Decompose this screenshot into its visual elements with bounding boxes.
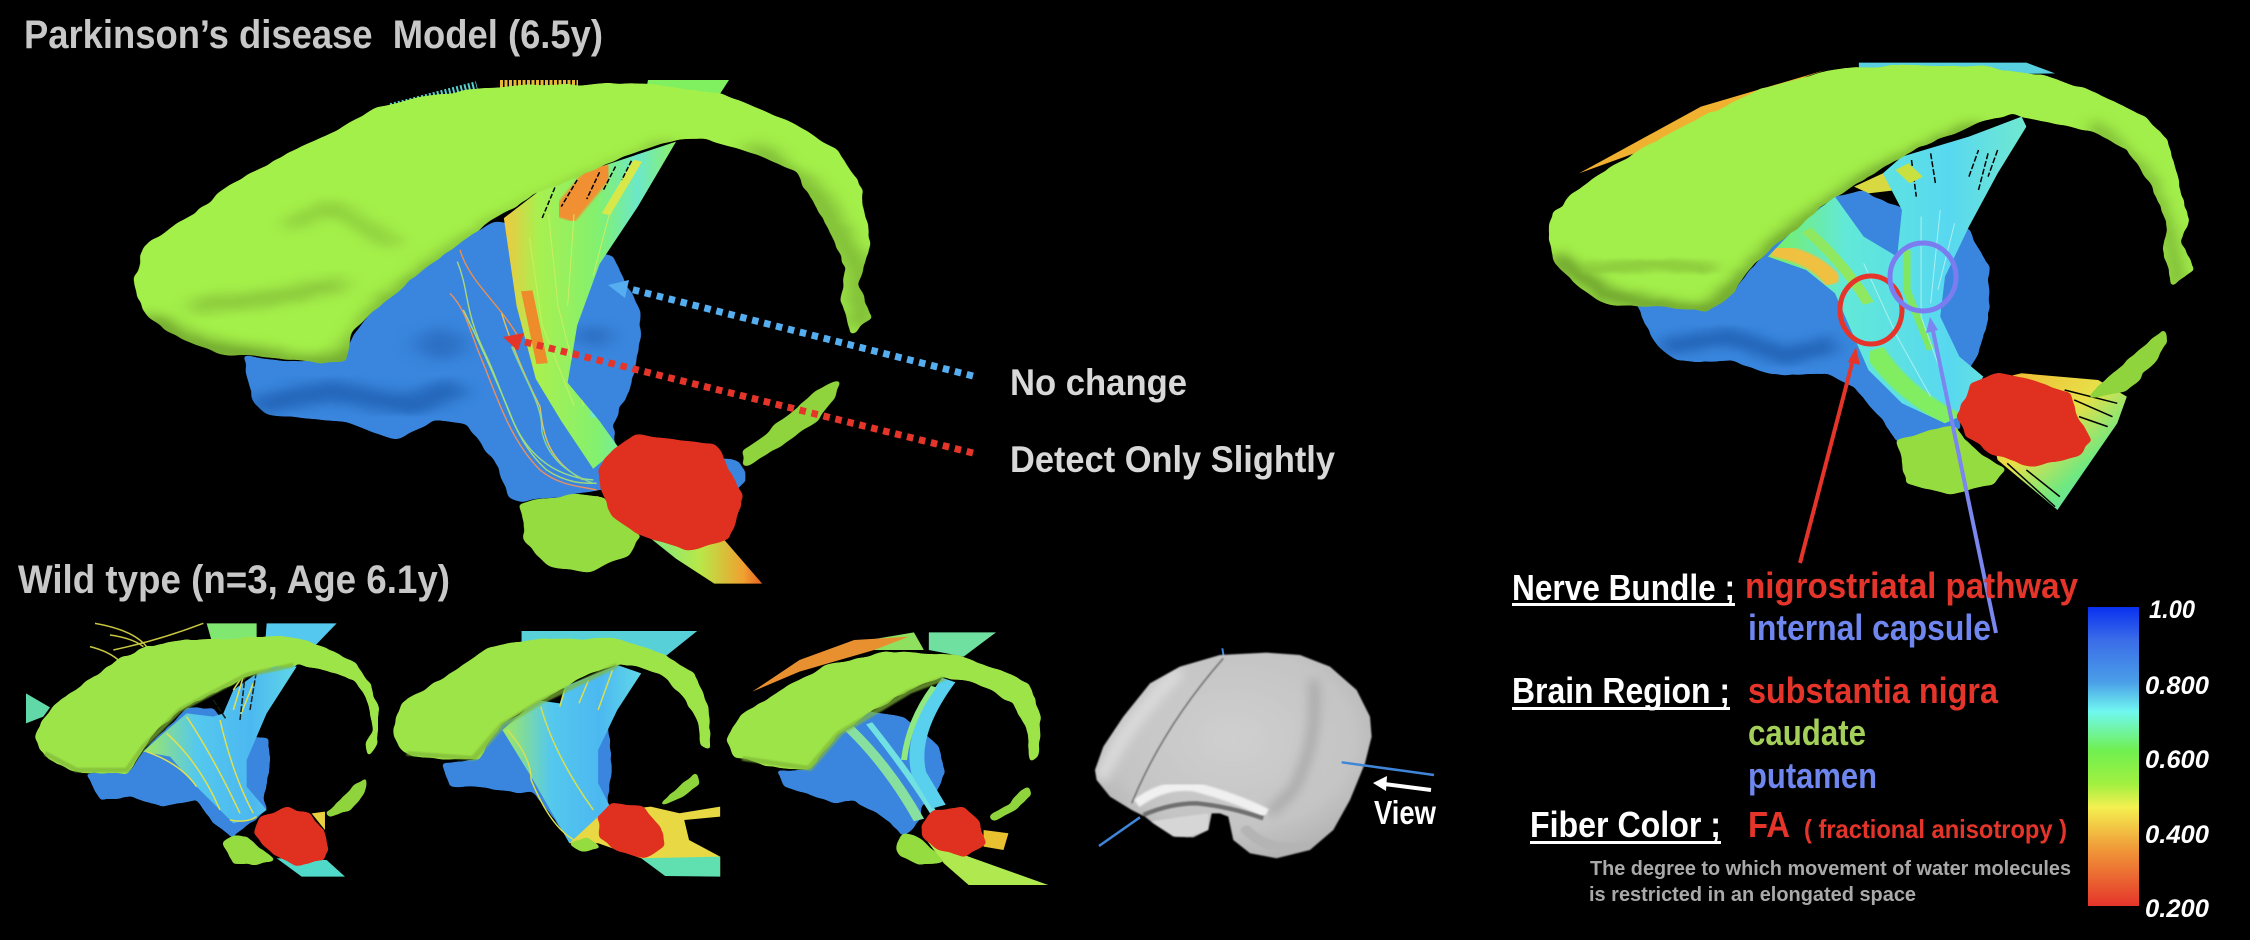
label: view: View [1374, 794, 1436, 831]
arrow: blue dotted, no change [608, 280, 973, 376]
fibers above caudate [392, 80, 729, 112]
putamen [242, 222, 746, 501]
title: Parkinson's disease model: Parkinson’s disease Model (6.5y) [24, 13, 603, 57]
substantia nigra [1957, 373, 2091, 467]
color bar: FA scale: 0.400 [2145, 821, 2209, 849]
FA description: is restricted in an elongated space [1589, 884, 1916, 906]
color bar: FA scale [2088, 596, 2209, 923]
label: detect only slightly: Detect Only Slightly [1010, 439, 1335, 480]
legend: brain region: Brain Region ; [1512, 670, 1730, 711]
legend: fiber color: FA [1748, 804, 1790, 845]
fibers behind caudate [1579, 63, 2055, 193]
legend: nerve bundle: Nerve Bundle ; [1512, 567, 1735, 608]
label: no change: No change [1010, 362, 1187, 403]
caudate [1548, 65, 2194, 313]
FA description: The degree to which movement of water molecules [1590, 858, 2071, 880]
substantia nigra [600, 434, 743, 551]
arrow: red to nigrostriatal pathway [1800, 347, 1860, 563]
thin strands: nigrostriatal pathway, detected only slightly [450, 250, 598, 498]
caudate lower fragment [520, 494, 641, 572]
legend: brain region: caudate [1748, 712, 1866, 753]
color bar: FA scale: 0.600 [2145, 746, 2209, 774]
caudate lower fragment [1897, 427, 2005, 495]
caudate tail fragment [743, 379, 841, 467]
legend: fiber color [1530, 804, 2067, 845]
legend: brain region: putamen [1748, 755, 1877, 796]
circle: nigrostriatal pathway [1840, 276, 1902, 344]
figure: wild type brain 1 [26, 623, 378, 877]
legend: fiber color: Fiber Color ; [1530, 804, 1721, 845]
arrow: red dotted, detect only slightly [503, 333, 973, 453]
FA description [1589, 858, 2071, 906]
arrow: blue to internal capsule [1926, 317, 1996, 633]
legend: nerve bundle [1512, 565, 2078, 648]
fiber bundle: internal capsule [504, 142, 676, 469]
color bar: FA scale: 0.800 [2145, 672, 2209, 700]
arrow: view direction [1373, 776, 1431, 791]
color bar: FA scale: 1.00 [2149, 596, 2195, 624]
figure: wild type brain 3 [727, 632, 1048, 885]
figure: annotated wild type reference brain [1548, 63, 2194, 510]
circle: internal capsule [1890, 243, 1956, 311]
fiber tail below substantia nigra [638, 528, 762, 584]
legend: brain region [1512, 670, 1999, 796]
fiber wedge right of substantia nigra [1978, 373, 2127, 510]
fiber bundles [1768, 117, 2026, 423]
figure: Parkinson's disease model tractography [135, 80, 871, 584]
figure: grey whole brain with view direction [1095, 648, 1434, 858]
legend: nerve bundle: nigrostriatal pathway [1745, 565, 2078, 606]
legend: nerve bundle: internal capsule [1748, 607, 1991, 648]
caudate [135, 83, 871, 367]
color bar: FA scale: 0.200 [2145, 895, 2209, 923]
legend: fiber color: ( fractional anisotropy ) [1804, 814, 2067, 844]
caudate tail fragment [2089, 328, 2167, 398]
figure: wild type brain 2 [392, 631, 720, 877]
heading: wild type: Wild type (n=3, Age 6.1y) [18, 558, 450, 602]
putamen [1636, 192, 1988, 442]
legend: brain region: substantia nigra [1748, 670, 1999, 711]
